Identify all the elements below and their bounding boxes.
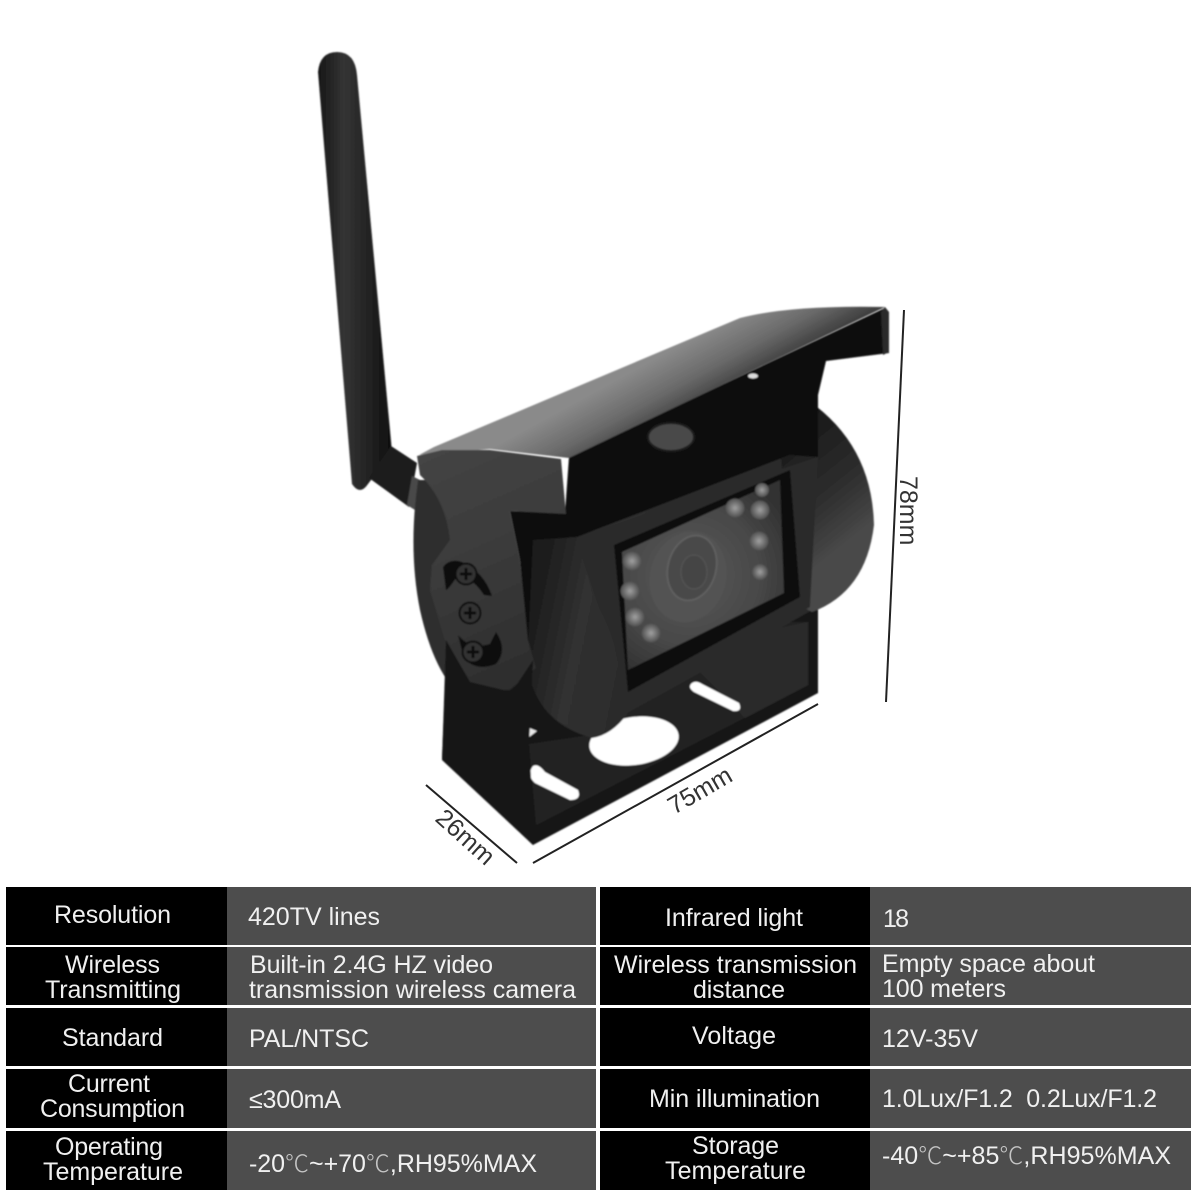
row: Operating / Storage Temperature: Temperature [665, 1157, 806, 1185]
dimension: depth 26mm [426, 785, 517, 871]
row: Current Consumption / Min illumination: Current [68, 1070, 150, 1098]
mounting bracket [442, 600, 818, 845]
row: Standard / Voltage: Voltage [692, 1022, 776, 1050]
infrared LEDs [620, 483, 770, 642]
black window frame [614, 470, 800, 692]
row: Current Consumption / Min illumination: Consumption [40, 1095, 185, 1123]
camera body [522, 395, 874, 738]
row: Wireless Transmitting / transmission distance: 100 meters [882, 975, 1006, 1003]
row: Standard / Voltage: 12V-35V [882, 1025, 978, 1053]
hood badge [648, 423, 694, 451]
side plate [417, 450, 566, 690]
row: Resolution / Infrared light: Resolution [54, 901, 171, 929]
dimension: depth 26mm: 26mm [430, 804, 500, 871]
row: Wireless Transmitting / transmission distance: Empty space about [882, 950, 1095, 978]
antenna [318, 52, 422, 510]
dimension: height 78mm: 78mm [894, 476, 922, 545]
specification table [6, 887, 1191, 1190]
row: Operating / Storage Temperature: Temperature [43, 1158, 183, 1186]
row: Wireless Transmitting / transmission distance [6, 947, 1191, 1005]
mounting slots and screws [443, 561, 502, 667]
row: Wireless Transmitting / transmission distance: Wireless [65, 951, 160, 979]
hood top surface [419, 307, 885, 458]
row: Wireless Transmitting / transmission distance: transmission wireless camera [249, 976, 576, 1004]
row: Resolution / Infrared light: 420TV lines [248, 903, 380, 931]
row: Operating / Storage Temperature: Storage [692, 1132, 779, 1160]
row: Current Consumption / Min illumination [6, 1069, 1191, 1128]
row: Operating / Storage Temperature [6, 1131, 1191, 1190]
right lobe [780, 395, 874, 612]
row: Resolution / Infrared light [6, 887, 1191, 945]
row: Wireless Transmitting / transmission distance: Transmitting [45, 976, 181, 1004]
bracket slot right [690, 682, 740, 711]
row: Resolution / Infrared light: 18 [883, 905, 909, 933]
bracket slot left [530, 765, 579, 800]
row: Wireless Transmitting / transmission distance: distance [693, 976, 785, 1004]
bracket arm [442, 640, 535, 845]
lens [639, 523, 737, 631]
hood reflection dot [748, 374, 758, 378]
dimension: height 78mm [886, 310, 922, 702]
product photo: wireless camera [318, 52, 889, 845]
row: Wireless Transmitting / transmission distance: Wireless transmission [614, 951, 857, 979]
bracket hole [586, 711, 682, 771]
sun hood underside [510, 308, 889, 650]
lens window [622, 480, 784, 670]
row: Standard / Voltage: PAL/NTSC [249, 1025, 369, 1053]
rear round housing [413, 480, 510, 680]
row: Wireless Transmitting / transmission distance: Built-in 2.4G HZ video [250, 951, 493, 979]
dimension: width 75mm [533, 704, 818, 863]
row: Operating / Storage Temperature: -20℃~+70℃,RH95%MAX [249, 1144, 537, 1179]
row: Current Consumption / Min illumination: Min illumination [649, 1085, 820, 1113]
row: Operating / Storage Temperature: -40℃~+85℃,RH95%MAX [882, 1136, 1171, 1171]
row: Standard / Voltage: Standard [62, 1024, 163, 1052]
dimension: width 75mm: 75mm [663, 761, 737, 820]
row: Current Consumption / Min illumination: ≤300mA [249, 1086, 341, 1114]
row: Standard / Voltage [6, 1008, 1191, 1066]
row: Current Consumption / Min illumination: 1.0Lux/F1.2 0.2Lux/F1.2 [882, 1085, 1157, 1113]
row: Resolution / Infrared light: Infrared light [665, 904, 803, 932]
front panel [577, 457, 818, 711]
row: Operating / Storage Temperature: Operating [55, 1133, 163, 1161]
